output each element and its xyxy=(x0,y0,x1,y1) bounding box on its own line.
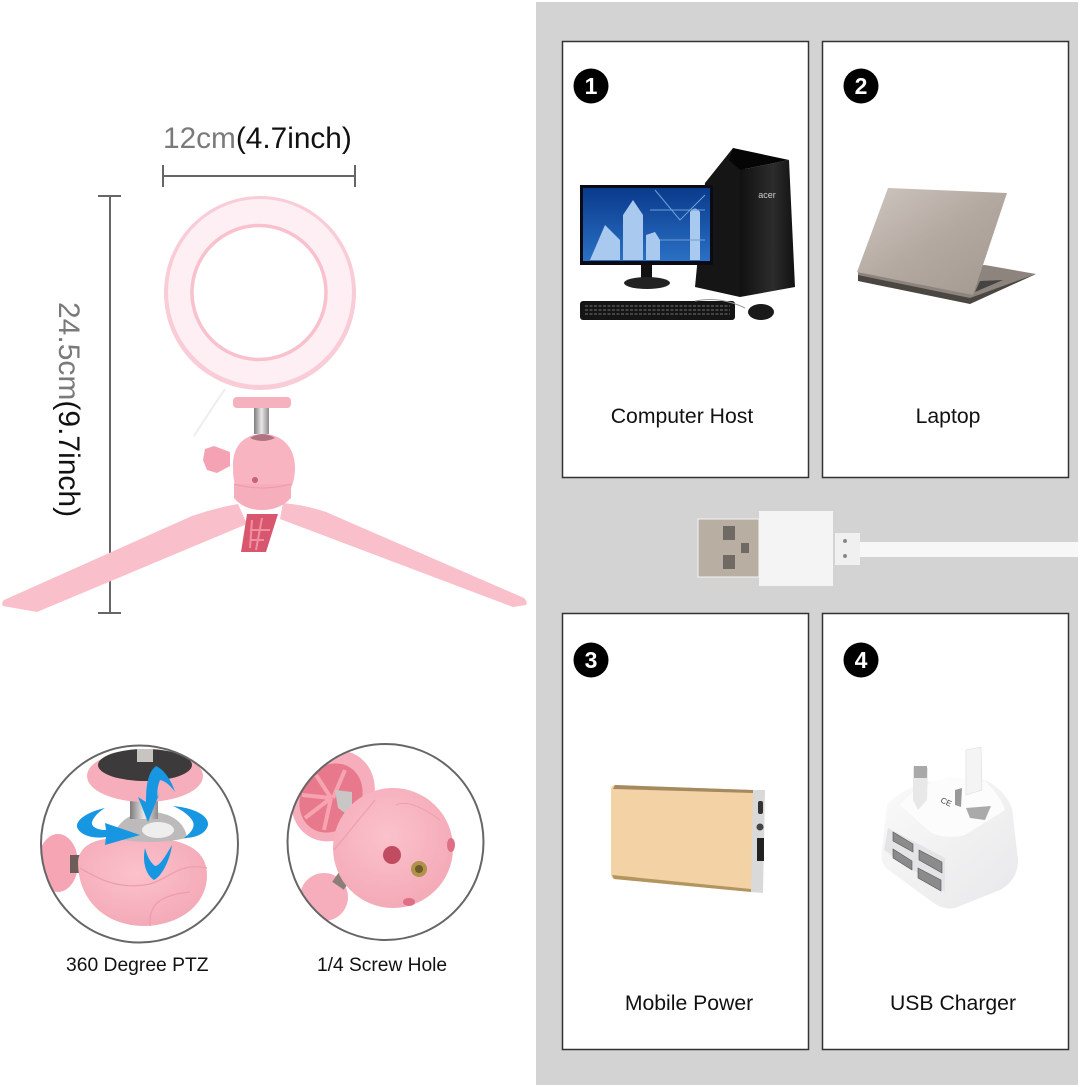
card 4: usb charger xyxy=(822,614,1068,1050)
left pin xyxy=(913,766,928,810)
ball head xyxy=(233,434,295,495)
left pin tip xyxy=(914,766,927,778)
ribbed disc xyxy=(292,752,375,842)
top disc xyxy=(87,758,203,802)
metal neck xyxy=(335,790,352,812)
cable xyxy=(860,542,1078,557)
ball head hole xyxy=(252,477,258,483)
relief dots xyxy=(843,539,847,558)
monitor frame xyxy=(580,185,713,265)
grey power source panel xyxy=(536,2,1078,1085)
plug slots xyxy=(723,526,735,540)
hole xyxy=(383,846,401,864)
wedge ribs xyxy=(250,518,270,550)
knob shaft xyxy=(332,873,346,890)
ball seam xyxy=(334,800,440,850)
dome highlight xyxy=(142,822,174,838)
collar xyxy=(234,484,291,510)
base underside xyxy=(858,274,1036,304)
ring outer xyxy=(164,196,356,390)
insert center xyxy=(415,865,423,873)
ring light on tripod xyxy=(2,196,527,612)
disc ribs xyxy=(302,770,345,830)
laptop base xyxy=(858,265,1036,303)
number badge 1: 1 xyxy=(585,73,598,99)
bottom edge xyxy=(612,875,751,892)
power wire xyxy=(194,389,225,436)
metal post xyxy=(254,406,269,434)
screw stud xyxy=(137,749,153,762)
indicator xyxy=(756,824,764,830)
white housing xyxy=(759,511,833,586)
ring inner xyxy=(192,226,326,360)
left horizontal arrow xyxy=(77,808,140,845)
body xyxy=(882,780,1018,908)
caption: 1/4 Screw Hole: 1/4 Screw Hole xyxy=(317,955,447,976)
lower knob xyxy=(300,873,348,921)
port panel xyxy=(884,828,945,892)
charger illustration xyxy=(882,747,1018,908)
ball top shadow xyxy=(250,434,275,441)
keyboard xyxy=(580,301,735,320)
earth pin xyxy=(966,747,982,795)
side knob xyxy=(42,834,78,892)
number badge 3 xyxy=(574,642,608,678)
pink ball body xyxy=(78,837,207,926)
card frame xyxy=(822,42,1068,478)
circle outline xyxy=(288,744,484,940)
edge hole right xyxy=(447,838,455,852)
card frame xyxy=(822,614,1068,1050)
plug center mark xyxy=(741,543,749,553)
ring diffuser xyxy=(168,199,352,385)
black plate xyxy=(98,749,192,781)
usb ports xyxy=(893,832,942,891)
lid xyxy=(857,188,1007,295)
strain relief xyxy=(835,533,860,565)
micro port xyxy=(758,801,763,814)
tower side xyxy=(695,148,745,297)
label: Computer Host xyxy=(611,405,753,428)
label: USB Charger xyxy=(890,992,1016,1015)
side edge xyxy=(750,790,765,893)
right horizontal arrow xyxy=(173,806,208,838)
knurled knob xyxy=(233,397,291,408)
card 2: laptop xyxy=(822,42,1068,478)
computer illustration xyxy=(580,148,795,320)
card frame xyxy=(562,614,808,1050)
label: Laptop xyxy=(916,405,980,428)
card 1: computer host xyxy=(562,42,808,478)
top edge xyxy=(613,785,753,793)
seam xyxy=(80,867,207,926)
monitor stand xyxy=(641,265,652,278)
height dimension label: 24.5cm (9.7inch) xyxy=(52,302,85,517)
width dimension line xyxy=(163,165,355,187)
edge hole bottom xyxy=(403,898,415,906)
circle outline xyxy=(41,746,238,942)
power bank illustration xyxy=(611,785,765,893)
number badge 4: 4 xyxy=(855,647,868,673)
top plate xyxy=(900,777,1005,837)
brass insert xyxy=(411,861,427,877)
warning label xyxy=(966,806,991,820)
number badge 3: 3 xyxy=(585,647,597,673)
monitor base xyxy=(624,277,670,289)
screen buildings xyxy=(590,200,700,260)
tower top xyxy=(729,148,789,170)
silver dome xyxy=(113,812,187,842)
tripod left leg xyxy=(2,504,247,612)
keys xyxy=(585,306,730,314)
collar seam xyxy=(234,484,291,488)
metal plug xyxy=(698,519,759,577)
tripod center wedge xyxy=(241,514,278,552)
detail circle: 1/4 screw hole xyxy=(275,735,484,940)
acer logo: acer xyxy=(758,190,776,200)
vertical arrow top xyxy=(138,766,175,822)
number badge 2 xyxy=(844,68,878,104)
number badge 4 xyxy=(844,642,878,678)
vertical arrow bottom xyxy=(144,845,172,880)
bank body xyxy=(611,785,753,892)
mouse xyxy=(748,304,774,320)
big ball xyxy=(333,788,453,908)
label: Mobile Power xyxy=(625,992,753,1015)
side knob xyxy=(203,446,230,473)
detail circle: 360 degree PTZ xyxy=(38,746,238,942)
caption: 360 Degree PTZ: 360 Degree PTZ xyxy=(66,955,209,976)
usb port xyxy=(757,838,764,861)
right pin xyxy=(955,788,962,807)
keyboard xyxy=(975,280,1003,292)
card frame xyxy=(562,42,808,478)
knob shaft xyxy=(70,855,80,873)
tower front xyxy=(740,160,795,297)
neck xyxy=(130,801,158,819)
height dimension line xyxy=(98,196,121,613)
usb cable xyxy=(698,511,1078,586)
disc inner xyxy=(299,763,363,833)
ce label: CE xyxy=(939,796,953,809)
width dimension label: 12cm(4.7inch) xyxy=(163,122,352,155)
mouse cable xyxy=(695,300,745,308)
card 3: mobile power xyxy=(562,614,808,1050)
number badge 2: 2 xyxy=(855,73,867,99)
screen lines xyxy=(650,190,705,240)
plug slot lower xyxy=(723,555,735,569)
number badge 1 xyxy=(574,68,608,104)
laptop illustration xyxy=(857,188,1036,304)
tripod right leg xyxy=(280,503,527,607)
monitor screen xyxy=(583,188,710,261)
rotation arrows xyxy=(77,766,208,880)
